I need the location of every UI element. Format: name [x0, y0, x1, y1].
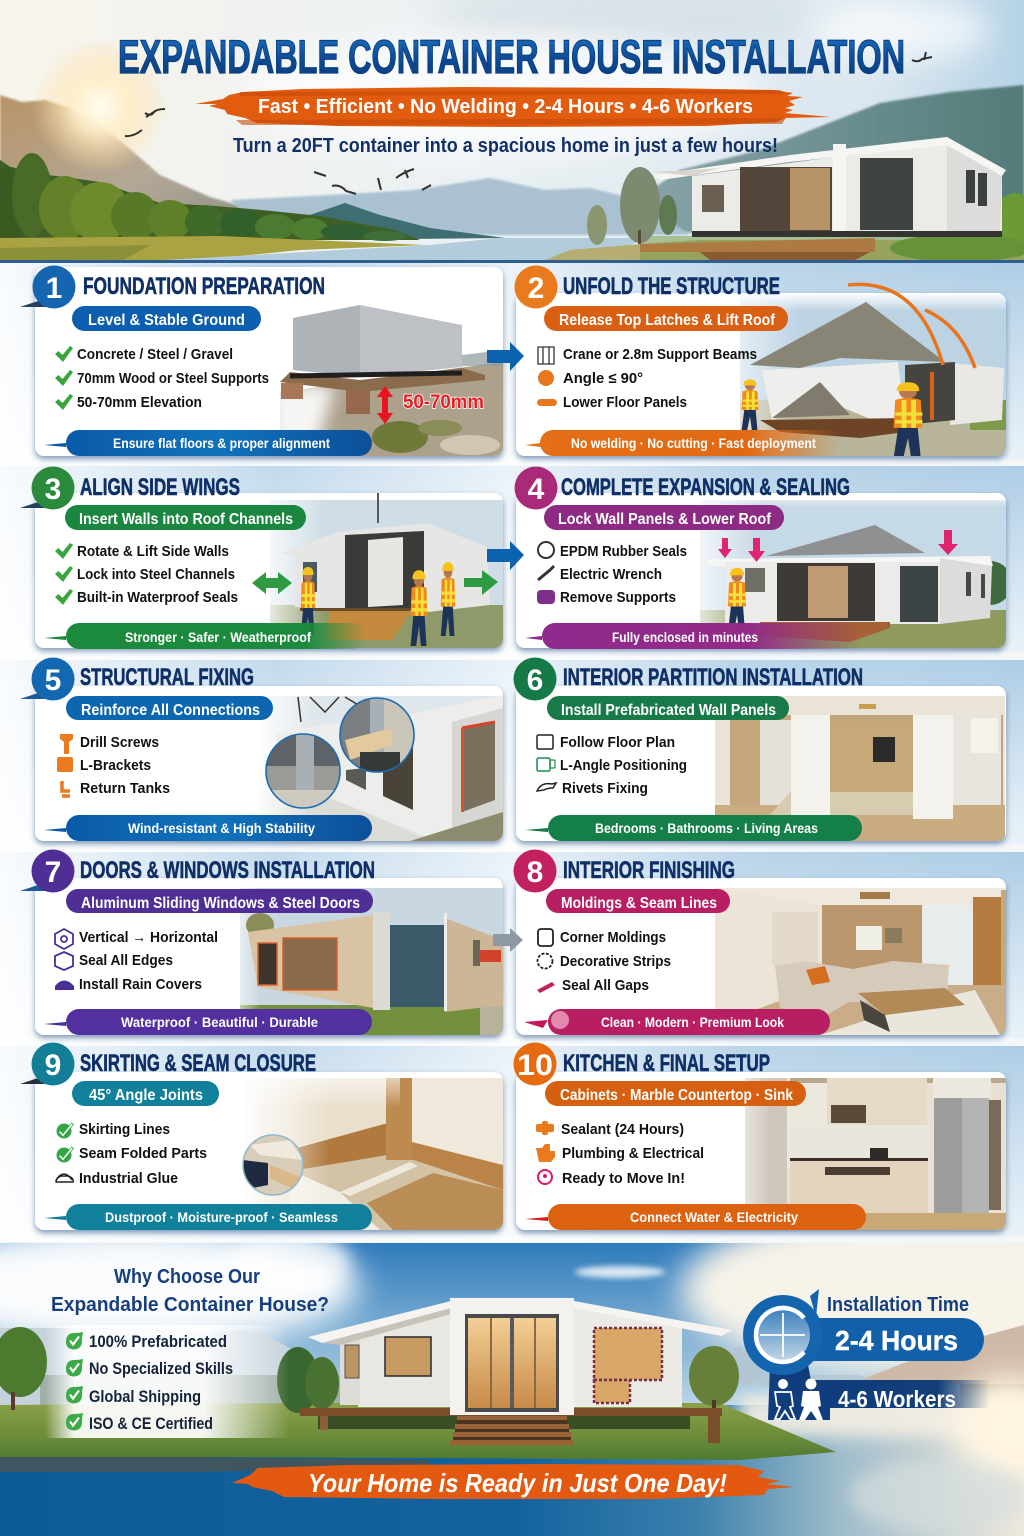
step 5 header [20, 658, 254, 700]
panel: step 10 kitchen and final setup [516, 1072, 1015, 1230]
check list [55, 346, 269, 411]
step 5 header: 5 [45, 664, 61, 697]
photo: roof being lifted [740, 293, 1006, 456]
pink press-down arrows [718, 530, 958, 562]
why choose block [45, 1266, 329, 1438]
right wing [574, 1305, 682, 1407]
footer pill: Connect Water & Electricity [630, 1209, 798, 1225]
why choose list: ISO & CE Certified [89, 1415, 213, 1433]
setup list: Ready to Move In! [562, 1170, 685, 1187]
right window [594, 1328, 662, 1380]
photo: tan house [225, 888, 503, 1035]
why choose list: Global Shipping [89, 1388, 201, 1406]
workers bar [775, 1378, 990, 1420]
hours pill: 2-4 Hours [835, 1325, 958, 1356]
footer pill [44, 623, 366, 649]
finishing list: Seal All Gaps [562, 977, 649, 994]
step 9 header: 9 [45, 1049, 61, 1082]
left tree [0, 1327, 47, 1410]
pill 6: Install Prefabricated Wall Panels [561, 702, 776, 719]
process list: Rivets Fixing [562, 780, 648, 797]
arrow 3 to 4 [487, 541, 524, 570]
check list: Concrete / Steel / Gravel [77, 346, 233, 363]
step 7 header [20, 850, 375, 892]
method list [55, 929, 218, 993]
panel: step 2 unfold the structure [516, 284, 1006, 458]
photo: container on supports [280, 305, 503, 456]
step 1 header [20, 266, 325, 308]
tool list: Lower Floor Panels [563, 394, 687, 411]
installation label: Installation Time [827, 1294, 969, 1316]
worker icons [775, 1378, 823, 1420]
why choose list: No Specialized Skills [89, 1360, 233, 1378]
clock icon [743, 1289, 823, 1375]
pill 2: Release Top Latches & Lift Roof [559, 312, 776, 329]
tool list: Electric Wrench [560, 566, 662, 583]
footer house [300, 1298, 732, 1445]
footer pill [525, 430, 840, 456]
birds [125, 52, 932, 194]
footer pill: No welding · No cutting · Fast deployment [571, 435, 816, 451]
step 8 header: INTERIOR FINISHING [563, 857, 735, 884]
check list: Industrial Glue [79, 1170, 178, 1187]
finishing list: Decorative Strips [560, 953, 671, 970]
footer pill: Wind-resistant & High Stability [128, 820, 315, 836]
why choose list [66, 1332, 233, 1433]
orange brush banner: Fast • Efficient • No Welding • 2-4 Hours • 4-6 Workers [258, 96, 753, 118]
house-side tree [277, 1347, 339, 1413]
finishing list: Corner Moldings [560, 929, 666, 946]
photo: side walls lifted [255, 493, 503, 648]
photo: kitchen [745, 1078, 1006, 1230]
step 2 header: 2 [528, 272, 544, 305]
left wing [358, 1305, 450, 1407]
closing brush banner: Your Home is Ready in Just One Day! [308, 1468, 727, 1498]
footer pill [44, 815, 372, 841]
photo: interior with partitions [715, 696, 1005, 841]
why choose heading [51, 1266, 329, 1316]
panel: step 1 foundation preparation [35, 267, 503, 470]
step 6 header: INTERIOR PARTITION INSTALLATION [563, 664, 863, 691]
tool list [537, 542, 687, 606]
tool list [537, 346, 757, 411]
process list: L-Angle Positioning [560, 757, 687, 774]
left window [385, 1337, 431, 1376]
footer pill: Waterproof · Beautiful · Durable [121, 1014, 318, 1030]
glass door [465, 1314, 559, 1412]
arrow 1 to 2 [487, 342, 524, 371]
orange lift arc [848, 284, 975, 368]
step 10 header: 10 [517, 1049, 553, 1082]
tool list: Crane or 2.8m Support Beams [563, 346, 757, 363]
check list [56, 1121, 207, 1187]
step 8 header: 8 [527, 856, 543, 889]
check list: Skirting Lines [79, 1121, 170, 1138]
photo: white house with bracket details [255, 695, 503, 842]
centre frame [450, 1298, 574, 1415]
blue connector [768, 1365, 830, 1420]
step 9 header [20, 1042, 316, 1086]
step 6 header: 6 [527, 664, 543, 697]
footer pill [525, 623, 862, 649]
pill 1: Level & Stable Ground [88, 312, 245, 329]
hardware list [57, 734, 170, 797]
pill 4 [544, 505, 784, 530]
pill 7 [66, 889, 373, 913]
check list: 70mm Wood or Steel Supports [77, 370, 269, 387]
method list: Vertical → Horizontal [79, 929, 218, 946]
panel: step 7 doors and windows installation [35, 878, 503, 1035]
height arrow [377, 386, 393, 424]
green right arrow [464, 570, 498, 595]
pill 1 [72, 306, 261, 331]
hardware list: Return Tanks [80, 780, 170, 797]
footer pill: Ensure flat floors & proper alignment [113, 435, 330, 451]
installation time widget [743, 1289, 990, 1420]
header scene: sky, mountains, lake and house [0, 0, 1024, 262]
pill 10: Cabinets · Marble Countertop · Sink [560, 1087, 793, 1104]
step 6 header [514, 658, 863, 700]
tool list: Remove Supports [560, 589, 676, 606]
why choose list: 100% Prefabricated [89, 1333, 227, 1351]
step 7 header: 7 [45, 856, 61, 889]
method list: Seal All Edges [79, 952, 173, 969]
step 3 header [20, 466, 240, 510]
pill 6 [547, 696, 789, 720]
step 7 header: DOORS & WINDOWS INSTALLATION [80, 857, 375, 884]
step 4 header: COMPLETE EXPANSION & SEALING [561, 474, 850, 501]
step 3 header: 3 [45, 473, 61, 506]
step 8 header [514, 850, 735, 892]
pill 2 [544, 306, 788, 331]
detail circle 2 [340, 698, 414, 772]
photo: skirting corner [240, 1078, 503, 1230]
pill 5: Reinforce All Connections [81, 702, 260, 719]
footer pill [44, 430, 372, 456]
process list [537, 734, 687, 797]
why choose heading: Why Choose Our [114, 1266, 260, 1288]
green expand arrows [252, 572, 292, 594]
tool list: Angle ≤ 90° [563, 370, 643, 387]
pill 10 [545, 1081, 806, 1106]
step 5 header: STRUCTURAL FIXING [80, 664, 254, 691]
step 10 header: KITCHEN & FINAL SETUP [563, 1050, 770, 1077]
footer pill: Clean · Modern · Premium Look [601, 1014, 784, 1030]
setup list [536, 1121, 704, 1187]
pill 9: 45° Angle Joints [89, 1087, 203, 1104]
pill 4: Lock Wall Panels & Lower Roof [558, 511, 772, 528]
orange brush banner [195, 87, 831, 127]
footer pill [524, 1009, 830, 1035]
why choose heading: Expandable Container House? [51, 1294, 329, 1316]
process list: Follow Floor Plan [560, 734, 675, 751]
check list: Seam Folded Parts [79, 1145, 207, 1162]
photo: living room [715, 888, 1006, 1035]
height label: 50-70mm [403, 392, 484, 413]
panel: step 3 align side wings [35, 493, 503, 649]
panel: step 5 structural fixing [35, 686, 503, 842]
check list: 50-70mm Elevation [77, 394, 202, 411]
step 1 header: 1 [46, 272, 62, 305]
hours pill [790, 1318, 984, 1361]
flow arrows between panels [487, 342, 524, 952]
subtitle: Turn a 20FT container into a spacious home in just a few hours! [233, 135, 778, 157]
pill 8 [546, 889, 730, 913]
footer pill [44, 1204, 372, 1230]
step headings and number badges [20, 266, 863, 1086]
check list [55, 543, 238, 606]
pill 3 [65, 505, 306, 530]
panel: step 8 interior finishing [516, 878, 1006, 1035]
pill 7: Aluminum Sliding Windows & Steel Doors [81, 895, 360, 912]
footer pill [44, 1009, 372, 1035]
footer pill: Stronger · Safer · Weatherproof [125, 629, 311, 645]
arrow 7 to 8 [493, 928, 523, 952]
right tree [689, 1346, 739, 1408]
header house [640, 137, 1006, 260]
sub-heading pills [65, 306, 806, 1106]
hardware list: Drill Screws [80, 734, 159, 751]
forest [0, 153, 420, 243]
method list: Install Rain Covers [79, 976, 202, 993]
footer pill [525, 815, 862, 841]
photo: expanded house [680, 493, 1012, 648]
deck shadow [318, 1416, 690, 1429]
detail circle 1 [266, 734, 340, 810]
step 10 header [514, 1042, 770, 1086]
pill 5 [66, 696, 273, 720]
pill 9 [72, 1081, 219, 1106]
steps [450, 1416, 574, 1445]
workers bar: 4-6 Workers [838, 1386, 956, 1412]
footer scene: sky, lake, grass [0, 1243, 1024, 1536]
roofs [308, 1301, 451, 1343]
panel: step 9 skirting and seam closure [35, 1072, 503, 1230]
check list: Rotate & Lift Side Walls [77, 543, 229, 560]
footer pill [525, 1204, 866, 1230]
step 4 header: 4 [528, 473, 545, 506]
pill 8: Moldings & Seam Lines [561, 895, 717, 912]
hardware list: L-Brackets [80, 757, 151, 774]
step 2 header [514, 266, 780, 308]
detail circle [243, 1135, 303, 1195]
footer pill: Dustproof · Moisture-proof · Seamless [105, 1209, 338, 1225]
step 2 header: UNFOLD THE STRUCTURE [563, 273, 780, 300]
check list: Lock into Steel Channels [77, 566, 235, 583]
footer pill: Bedrooms · Bathrooms · Living Areas [595, 820, 818, 836]
setup list: Plumbing & Electrical [562, 1145, 704, 1162]
deck [300, 1408, 722, 1416]
footer pill: Fully enclosed in minutes [612, 629, 758, 645]
step 9 header: SKIRTING & SEAM CLOSURE [80, 1050, 316, 1077]
setup list: Sealant (24 Hours) [561, 1121, 684, 1138]
panel: step 4 complete expansion and sealing [516, 493, 1012, 649]
finishing list [537, 929, 671, 994]
step 4 header [514, 466, 850, 510]
step 1 header: FOUNDATION PREPARATION [83, 273, 325, 300]
tool list: EPDM Rubber Seals [560, 543, 687, 560]
check list: Built-in Waterproof Seals [77, 589, 238, 606]
pill 3: Insert Walls into Roof Channels [79, 511, 293, 528]
step 3 header: ALIGN SIDE WINGS [80, 474, 240, 501]
panel: step 6 interior partition installation [516, 686, 1006, 841]
